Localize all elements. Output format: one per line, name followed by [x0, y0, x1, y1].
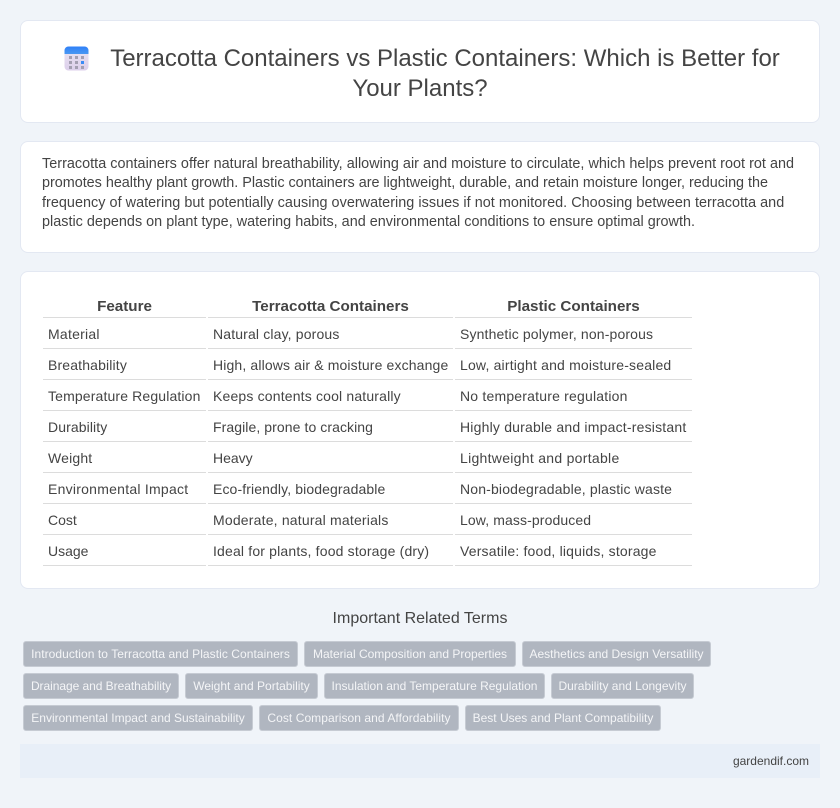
comparison table [43, 298, 692, 566]
title: Your Plants? [352, 75, 488, 102]
row: Cost: Moderate, natural materials [213, 512, 389, 528]
row: Material [48, 326, 653, 342]
row: Durability: Highly durable and impact-resistant [460, 419, 686, 435]
row: Environmental Impact: Non-biodegradable, plastic waste [460, 481, 672, 497]
tag: Material Composition and Properties [313, 647, 507, 661]
panel: introduction [20, 141, 820, 253]
tag [23, 641, 298, 667]
intro text: frequency of watering but potentially causing overwatering issues if not monitored. Choosing between terracotta and [42, 195, 784, 211]
row: Material: Natural clay, porous [213, 326, 339, 342]
tag [465, 705, 661, 731]
row: Temperature Regulation [48, 388, 628, 404]
row: Usage: Usage [48, 543, 88, 559]
row: Durability: Fragile, prone to cracking [213, 419, 373, 435]
row: Cost: Cost [48, 512, 77, 528]
row: Temperature Regulation: No temperature regulation [460, 388, 628, 404]
tag: Introduction to Terracotta and Plastic Containers [31, 647, 290, 661]
header: Plastic Containers: Plastic Containers [507, 298, 640, 315]
row: Breathability: High, allows air & moisture exchange [213, 357, 448, 373]
panel: comparison table [20, 271, 820, 589]
row: Cost: Low, mass-produced [460, 512, 591, 528]
row: Weight [48, 450, 620, 466]
row: Usage: Versatile: food, liquids, storage [460, 543, 657, 559]
intro text: promotes healthy plant growth. Plastic containers are lightweight, durable, and retain moisture longer, reducing the [42, 175, 768, 191]
tag [522, 641, 711, 667]
title [110, 45, 780, 102]
row: Material: Synthetic polymer, non-porous [460, 326, 653, 342]
tag [324, 673, 545, 699]
row: Environmental Impact: Eco-friendly, biodegradable [213, 481, 385, 497]
icon: calendar [64, 46, 88, 70]
tag: Weight and Portability [193, 679, 310, 693]
row: Material: Material [48, 326, 100, 342]
tag [23, 673, 179, 699]
row: Environmental Impact [48, 481, 672, 497]
intro text [42, 156, 794, 230]
row: Weight: Lightweight and portable [460, 450, 620, 466]
intro text: Terracotta containers offer natural breathability, allowing air and moisture to circulate, which helps prevent root rot and [42, 156, 794, 172]
row: Usage: Ideal for plants, food storage (dry) [213, 543, 429, 559]
tag list: related terms [23, 641, 711, 731]
related terms heading: Important Related Terms [333, 610, 507, 627]
tag [259, 705, 459, 731]
row: Temperature Regulation: Temperature Regulation [48, 388, 200, 404]
tag [304, 641, 516, 667]
tag: Insulation and Temperature Regulation [332, 679, 537, 693]
header panel [20, 20, 820, 123]
footer source: gardendif.com [733, 754, 809, 768]
row: Durability: Durability [48, 419, 107, 435]
header: Feature: Feature [97, 298, 152, 315]
row: Environmental Impact: Environmental Impact [48, 481, 188, 497]
tag: Drainage and Breathability [31, 679, 171, 693]
tag: Best Uses and Plant Compatibility [473, 711, 653, 725]
row: Usage [48, 543, 657, 559]
tag [185, 673, 318, 699]
tag: Cost Comparison and Affordability [267, 711, 451, 725]
title: Terracotta Containers vs Plastic Containers: Which is Better for [110, 45, 780, 72]
tag [551, 673, 694, 699]
row: Weight: Weight [48, 450, 92, 466]
row: Breathability: Breathability [48, 357, 127, 373]
row: Durability [48, 419, 686, 435]
tag: Aesthetics and Design Versatility [529, 647, 704, 661]
tag [23, 705, 253, 731]
footer bar [20, 744, 820, 778]
tag: Durability and Longevity [558, 679, 687, 693]
row: Weight: Heavy [213, 450, 253, 466]
row: Breathability: Low, airtight and moisture-sealed [460, 357, 671, 373]
row: Temperature Regulation: Keeps contents cool naturally [213, 388, 401, 404]
header: Terracotta Containers: Terracotta Containers [252, 298, 409, 315]
intro text: plastic depends on plant type, watering habits, and environmental conditions to ensure optimal growth. [42, 214, 695, 230]
tag: Environmental Impact and Sustainability [31, 711, 245, 725]
row: Cost [48, 512, 591, 528]
row: Breathability [48, 357, 671, 373]
